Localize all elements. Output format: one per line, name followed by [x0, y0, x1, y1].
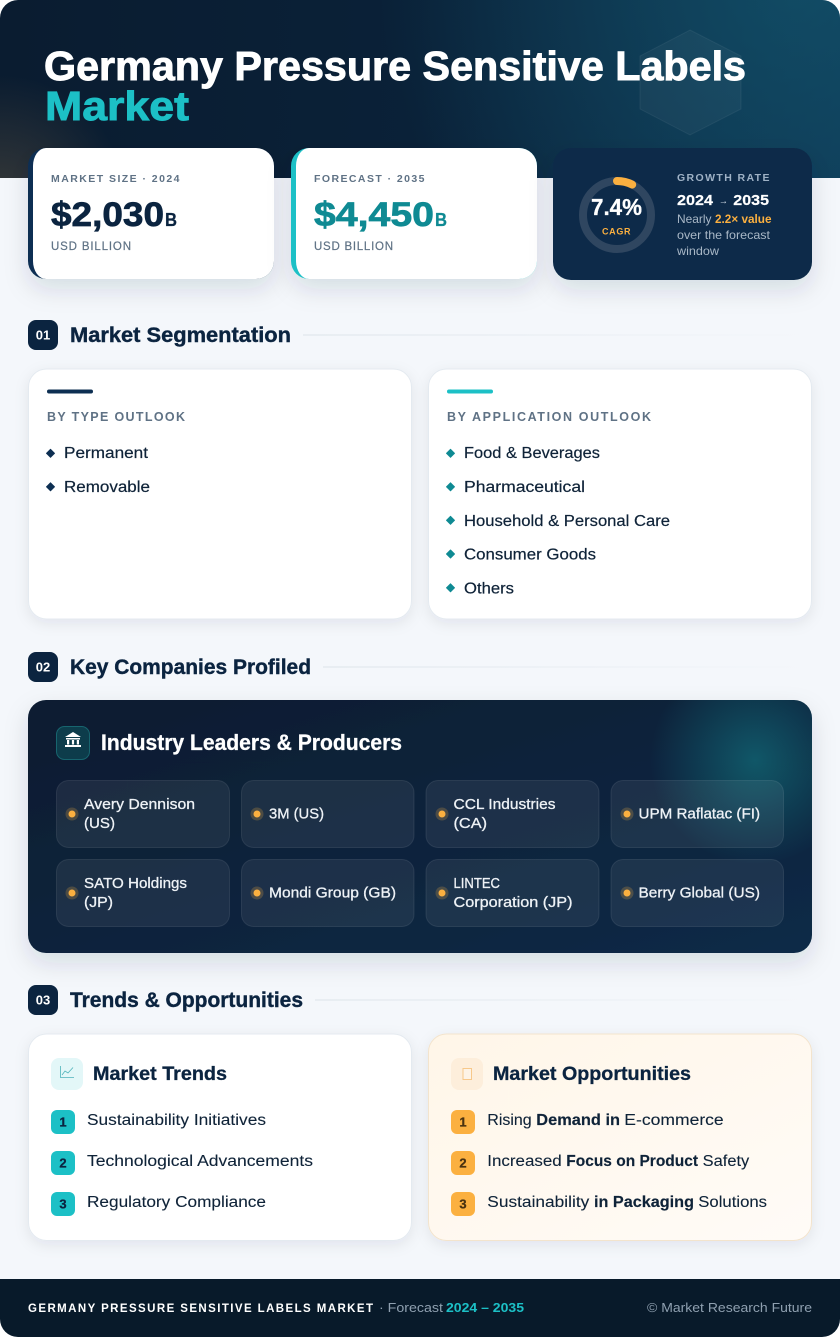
stat card: forecast: FORECAST · 2035: [314, 173, 425, 185]
icon: chart: [51, 1058, 83, 1090]
opportunity 3: Sustainability: [487, 1194, 590, 1211]
list: application items: [446, 445, 670, 598]
company: Berry Global: [611, 860, 784, 926]
footer: [0, 1279, 840, 1337]
trend 3: 3: [59, 1196, 67, 1212]
footer: GERMANY PRESSURE SENSITIVE LABELS MARKET: [28, 1303, 373, 1315]
icon: bank: [56, 726, 90, 760]
hexagon decoration: [640, 30, 741, 135]
section heading: trends and opportunities: [28, 985, 812, 1015]
section heading: key companies: [28, 652, 812, 682]
trend 3: Regulatory Compliance: [87, 1194, 266, 1211]
trend 1: [51, 1110, 266, 1134]
icon: missing glyph box: [451, 1058, 483, 1090]
company: Mondi Group: [242, 860, 414, 926]
section heading: market segmentation: Market Segmentation: [70, 324, 291, 347]
company: LINTEC: LINTEC: [454, 875, 500, 892]
section heading: trends and opportunities: 03: [36, 992, 50, 1008]
stat card: market size: [28, 148, 274, 279]
company: CCL Industries: CCL Industries: [454, 796, 556, 813]
growth rate text: window: [676, 244, 719, 258]
growth rate text: 2035: [733, 192, 769, 209]
stat card: market size: USD BILLION: [51, 241, 131, 253]
panel: industry leaders: Industry Leaders & Producers: [101, 730, 402, 755]
opportunity 3: [451, 1192, 767, 1216]
stat card: growth rate: [553, 148, 812, 280]
list: application items: Pharmaceutical: [464, 479, 585, 496]
section heading: trends and opportunities: Trends & Opportunities: [70, 989, 303, 1012]
opportunity 2: Focus on Product: [566, 1153, 698, 1170]
stat card: forecast: $4,450: [314, 196, 434, 234]
growth rate text: GROWTH RATE: [677, 172, 770, 184]
company: CCL Industries: (CA): [454, 815, 487, 832]
trend 1: 1: [59, 1114, 67, 1130]
company: UPM Raflatac: UPM Raflatac (FI): [638, 806, 760, 822]
list: application items: Others: [464, 580, 514, 598]
panel: by application outlook: BY APPLICATION OUTLOOK: [447, 410, 651, 424]
company: Avery Dennison: (US): [84, 815, 115, 832]
company: Avery Dennison: [56, 780, 230, 848]
CAGR donut: CAGR: [602, 226, 631, 236]
list: application items: Household & Personal Care: [464, 513, 670, 530]
opportunity 3: Solutions: [698, 1194, 767, 1211]
company: SATO Holdings: SATO Holdings: [84, 875, 187, 892]
section heading: key companies: 02: [36, 660, 50, 674]
footer: 2024 – 2035: [446, 1301, 524, 1315]
growth rate text: 2024: [677, 192, 714, 209]
header banner: [0, 0, 840, 178]
opportunity 2: Increased: [487, 1153, 562, 1170]
company: 3M: 3M (US): [269, 806, 324, 822]
opportunity 2: Safety: [703, 1153, 750, 1170]
growth rate text: 2.2× value: [715, 212, 772, 226]
stat card: market size: MARKET SIZE · 2024: [51, 173, 180, 185]
section heading: market segmentation: 01: [36, 328, 50, 342]
CAGR donut: [583, 181, 651, 249]
company: Mondi Group: Mondi Group (GB): [269, 884, 396, 902]
panel: by type outlook: BY TYPE OUTLOOK: [47, 410, 185, 424]
opportunity 2: 2: [459, 1156, 467, 1170]
list: application items: Consumer Goods: [464, 546, 596, 564]
company: SATO Holdings: (JP): [84, 894, 113, 911]
stat card: forecast: B: [435, 210, 447, 230]
growth rate text: over the forecast: [677, 228, 771, 242]
growth rate text: [676, 172, 772, 258]
stat card: forecast: [291, 148, 537, 279]
growth rate text: →: [719, 195, 728, 207]
trend 2: 2: [59, 1156, 67, 1170]
list: type items: [46, 445, 150, 496]
trend 3: [51, 1192, 266, 1216]
opportunity 1: 1: [459, 1114, 467, 1130]
panel: by type outlook: [28, 369, 412, 619]
footer: © Market Research Future: [647, 1301, 812, 1315]
footer: · Forecast: [379, 1301, 444, 1315]
panel: market opportunities: Market Opportunities: [493, 1064, 691, 1085]
trend 1: Sustainability Initiatives: [87, 1112, 266, 1129]
section heading: market segmentation: [28, 320, 812, 350]
company: SATO Holdings: [56, 860, 230, 926]
list: type items: Permanent: [64, 445, 149, 462]
stat card: forecast: USD BILLION: [314, 241, 393, 253]
title: [44, 43, 746, 129]
opportunity 1: E-commerce: [624, 1112, 724, 1129]
growth rate text: Nearly: [677, 212, 712, 226]
list: type items: Removable: [64, 479, 150, 496]
trend 2: [51, 1151, 313, 1175]
panel: market trends: Market Trends: [93, 1064, 227, 1085]
opportunity 2: [451, 1151, 750, 1175]
title: Market: [45, 83, 189, 129]
stat card: market size: B: [165, 210, 177, 230]
opportunity 1: Demand in: [536, 1112, 620, 1129]
company: 3M: [242, 780, 414, 848]
company: Berry Global: Berry Global (US): [638, 884, 760, 902]
panel: market opportunities: [428, 1034, 812, 1240]
opportunity 1: Rising: [487, 1112, 532, 1129]
list: application items: Food & Beverages: [464, 445, 600, 462]
title: Germany Pressure Sensitive Labels: [44, 43, 746, 89]
opportunity 3: in Packaging: [594, 1194, 694, 1211]
opportunity 1: [451, 1110, 724, 1134]
panel: industry leaders: [28, 700, 812, 953]
company: LINTEC: [426, 860, 599, 926]
company: LINTEC: Corporation (JP): [454, 894, 572, 911]
panel: by application outlook: [428, 369, 812, 619]
trend 2: Technological Advancements: [87, 1153, 313, 1170]
panel: market trends: [28, 1034, 412, 1240]
stat card: market size: $2,030: [51, 196, 164, 234]
company: UPM Raflatac: [611, 780, 784, 848]
company: CCL Industries: [426, 780, 599, 848]
opportunity 3: 3: [459, 1196, 467, 1212]
company: Avery Dennison: Avery Dennison: [84, 796, 195, 813]
section heading: key companies: Key Companies Profiled: [70, 656, 311, 679]
CAGR donut: 7.4%: [591, 194, 642, 220]
